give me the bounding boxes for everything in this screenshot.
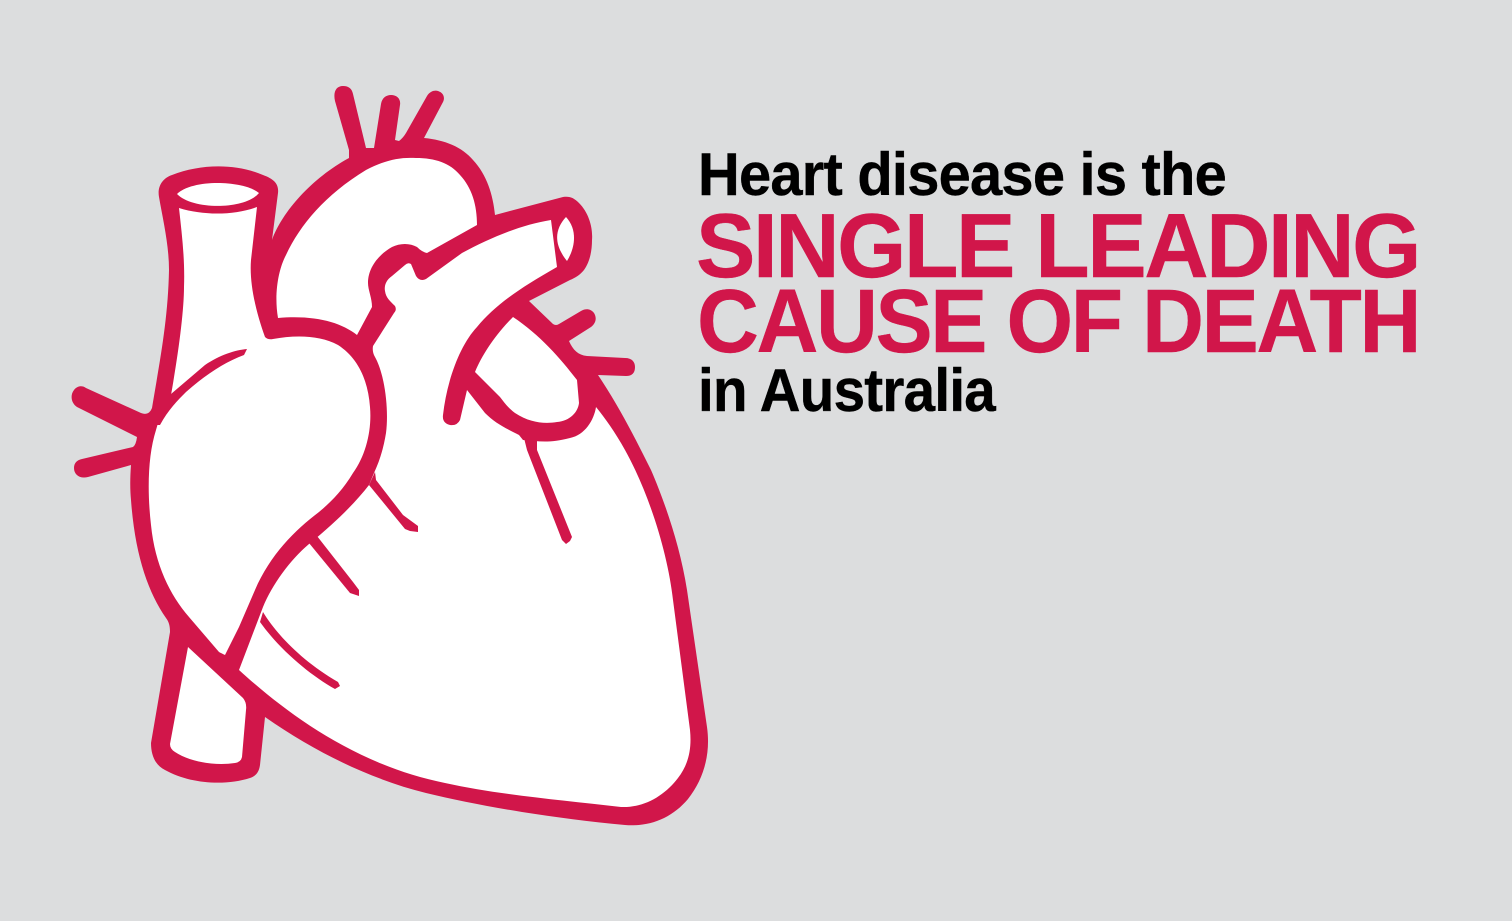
superior vena cava and right atrium [149, 207, 370, 655]
inferior vena cava [170, 647, 246, 764]
pulmonary artery opening [557, 217, 574, 261]
heading line: in Australia: in Australia [698, 357, 996, 424]
aorta [276, 158, 477, 335]
heading line: CAUSE OF DEATH: CAUSE OF DEATH [697, 272, 1419, 372]
icon: anatomical heart [72, 86, 708, 825]
heading line: SINGLE LEADING: SINGLE LEADING [696, 196, 1419, 297]
title text [696, 141, 1419, 424]
heading line: Heart disease is the: Heart disease is the [698, 141, 1226, 208]
heart outline silhouette [72, 86, 708, 825]
left atrium [475, 317, 579, 423]
coronary vessel branches [260, 438, 572, 689]
atrium vessel line [150, 349, 247, 425]
vena cava opening [177, 183, 259, 206]
main ventricle and pulmonary artery [239, 220, 690, 807]
